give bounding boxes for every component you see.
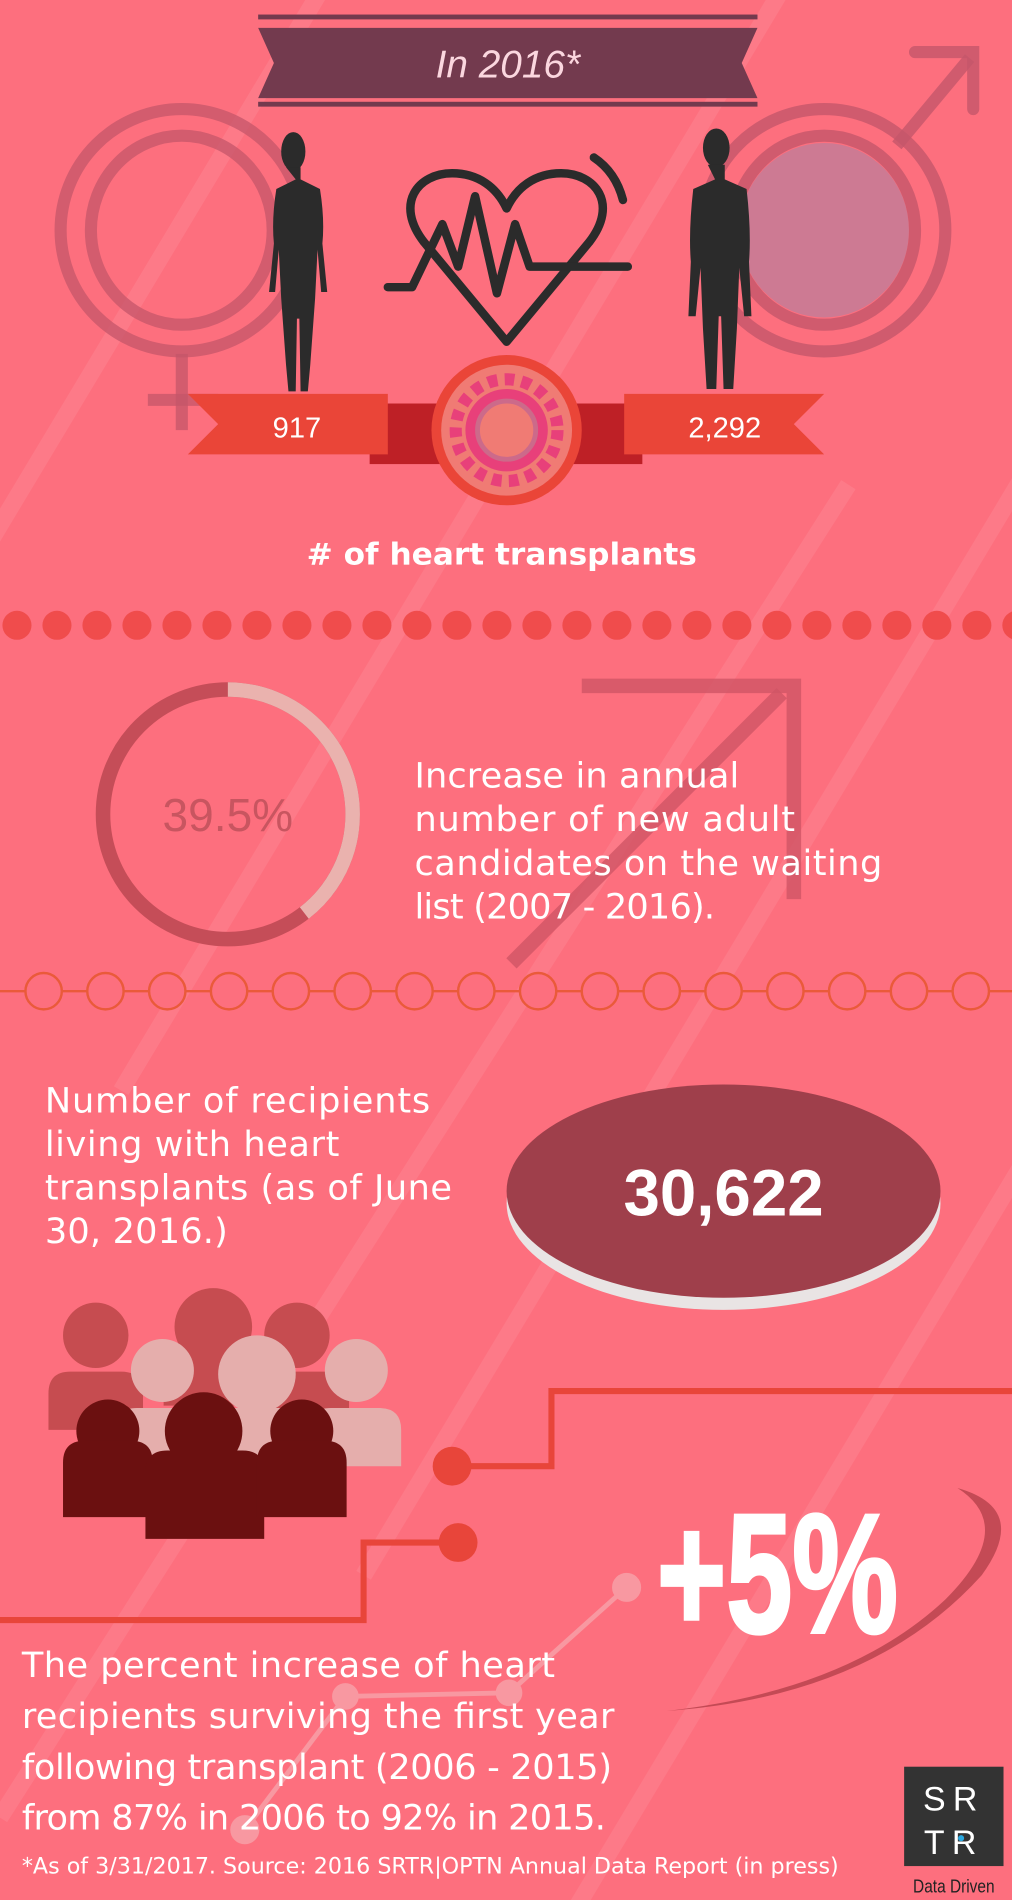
icon: heartbeat [388, 158, 628, 342]
swoosh [667, 1488, 1001, 1711]
icon: female silhouette [269, 132, 327, 391]
logo: SRTR: SR [923, 1780, 985, 1818]
icon: group of people [48, 1288, 401, 1539]
connector lines [0, 1391, 1012, 1842]
logo: SRTR: Data Driven [913, 1877, 995, 1897]
arrow: increase [511, 686, 794, 963]
icon: gear medallion [431, 355, 582, 505]
ribbon: counts: 917 [273, 412, 321, 444]
text: waiting list increase: number of new adult [414, 799, 795, 840]
logo: SRTR: TR [924, 1824, 984, 1862]
icon: male silhouette [688, 128, 751, 389]
title banner [258, 15, 757, 107]
title banner: In 2016* [436, 44, 582, 87]
text: recipients living: 30, 2016.) [45, 1211, 228, 1252]
donut chart: 39.5% [103, 689, 353, 939]
text: waiting list increase: list (2007 - 2016). [414, 886, 715, 927]
big number: +5%: +5% [657, 1479, 898, 1669]
ribbon: counts [188, 355, 824, 505]
footnote: *As of 3/31/2017. Source: 2016 SRTR|OPTN Annual Data Report (in press) [22, 1854, 839, 1879]
ellipse: 30,622: 30,622 [623, 1156, 824, 1229]
divider circles [0, 973, 1012, 1009]
text: recipients living: Number of recipients [45, 1080, 430, 1121]
text: waiting list increase: candidates on the waiting [414, 843, 882, 884]
text: waiting list increase: Increase in annual [414, 756, 739, 797]
icon: female symbol [61, 109, 303, 430]
heading: # of heart transplants: # of heart transplants [307, 538, 697, 573]
text: survival increase: following transplant (2006 - 2015) [22, 1747, 612, 1788]
text: recipients living: transplants (as of June [45, 1168, 452, 1209]
logo: SRTR [904, 1767, 1004, 1897]
donut chart: 39.5%: 39.5% [163, 789, 293, 841]
text: recipients living: living with heart [45, 1124, 339, 1165]
text: survival increase: from 87% in 2006 to 92% in 2015. [22, 1798, 606, 1839]
divider dots [2, 611, 1012, 640]
icon: male symbol [703, 52, 973, 351]
ribbon: counts: 2,292 [688, 412, 761, 444]
text: survival increase: The percent increase of heart [21, 1645, 555, 1686]
ellipse: 30,622 [507, 1085, 940, 1310]
text: survival increase: recipients surviving the first year [22, 1696, 615, 1737]
